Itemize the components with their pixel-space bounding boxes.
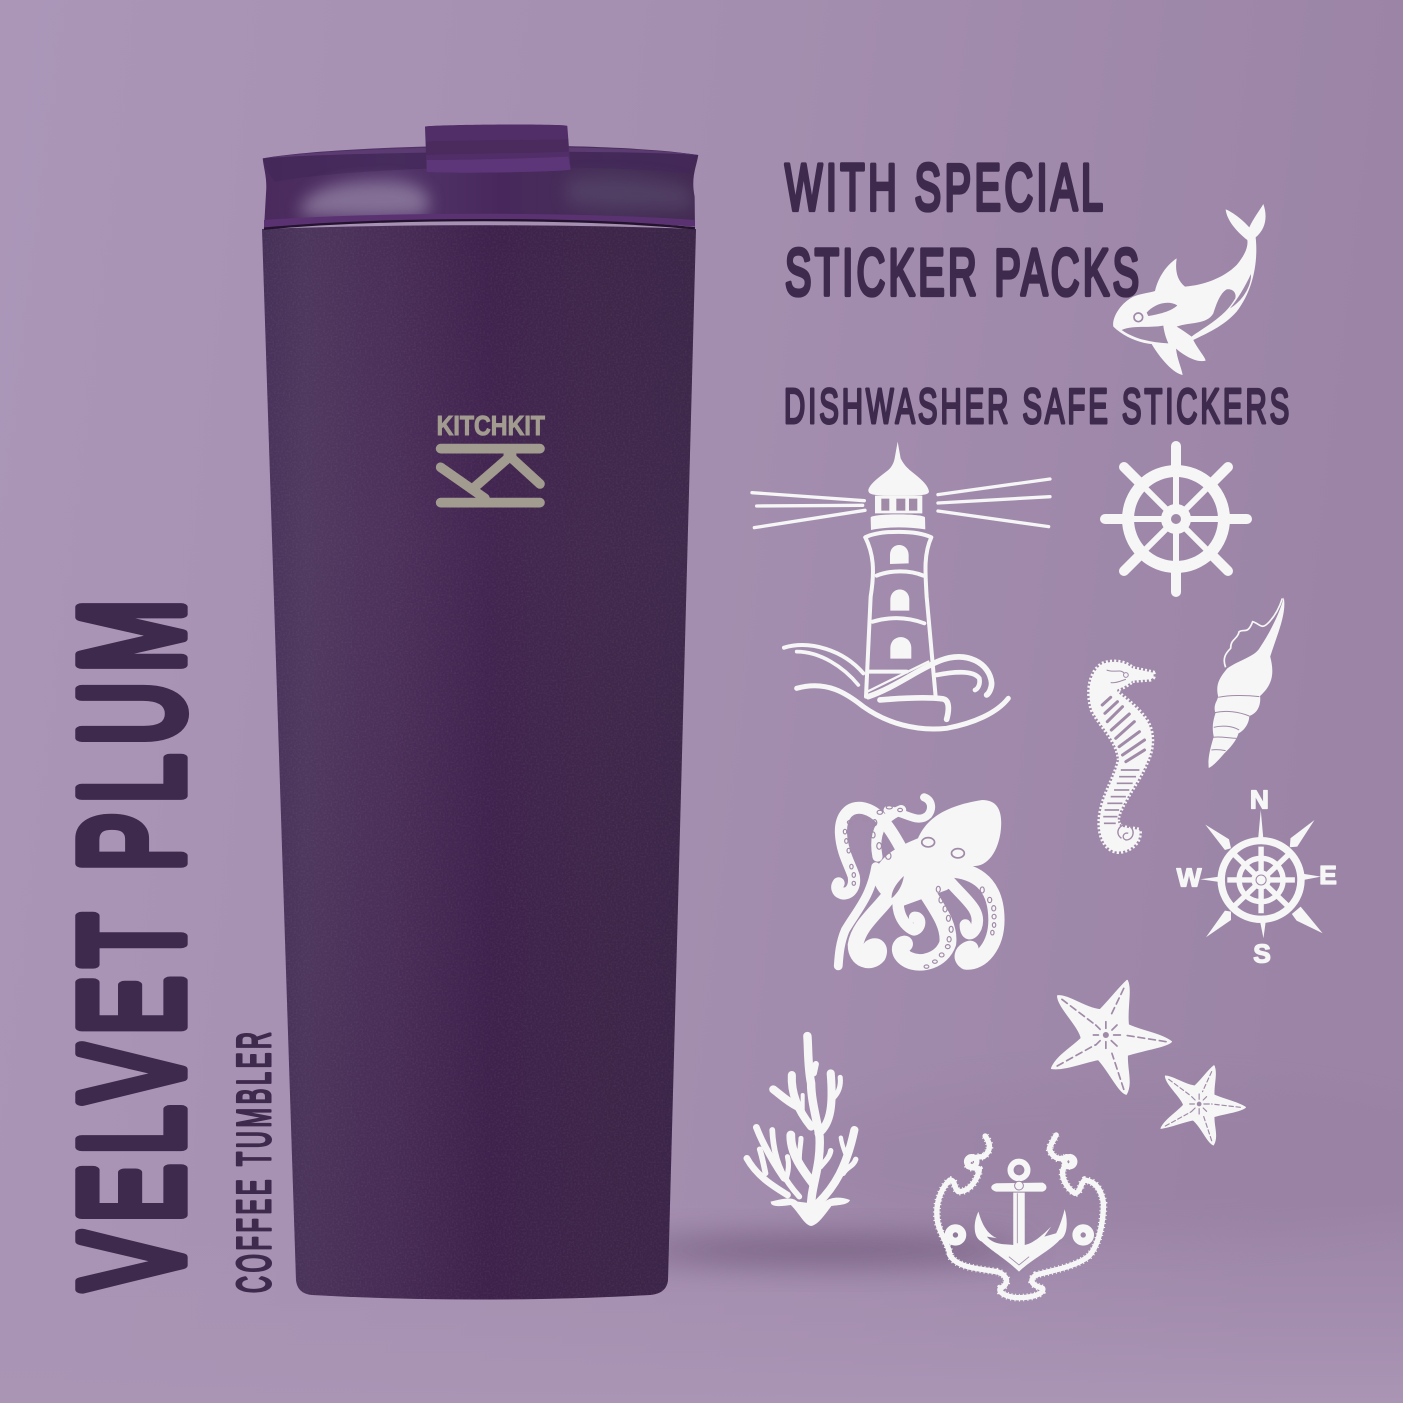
heading: with special sticker packs: WITH SPECIAL [785,151,1103,225]
subtitle: coffee tumbler: COFFEE TUMBLER [227,1032,280,1293]
icon: compass: S [1253,939,1271,969]
lid tab [425,125,571,173]
heading: with special sticker packs: STICKER PACKS [785,236,1139,310]
icon: compass: N [1250,784,1269,814]
tumbler [260,125,700,1304]
icon: anchor with rope [937,1135,1103,1298]
icon: compass: E [1319,860,1337,890]
icon: conch shell [1208,597,1284,768]
logo: KITCHKIT [437,410,545,441]
icon: orca whale [1113,204,1266,375]
tumbler lid [263,125,698,229]
icon: coral [747,1036,856,1226]
icon: compass: W [1177,863,1202,893]
icon: lighthouse [752,442,1050,729]
icon: large starfish [1052,981,1171,1094]
icon: ship wheel [1105,446,1247,592]
light rays [752,479,1050,528]
icon: seahorse [1089,662,1154,852]
heading: with special sticker packs [785,151,1139,310]
waves [784,645,1008,729]
suckers [843,806,996,968]
subheading: dishwasher safe stickers: DISHWASHER SAFE STICKERS [784,378,1289,434]
icon: compass [1177,784,1337,969]
logo [437,410,545,503]
icon: small starfish [1161,1066,1245,1145]
icon: octopus [837,797,1001,968]
title: velvet plum: VELVET PLUM [52,600,213,1290]
tumbler body [260,224,700,1304]
rope [937,1135,1103,1298]
